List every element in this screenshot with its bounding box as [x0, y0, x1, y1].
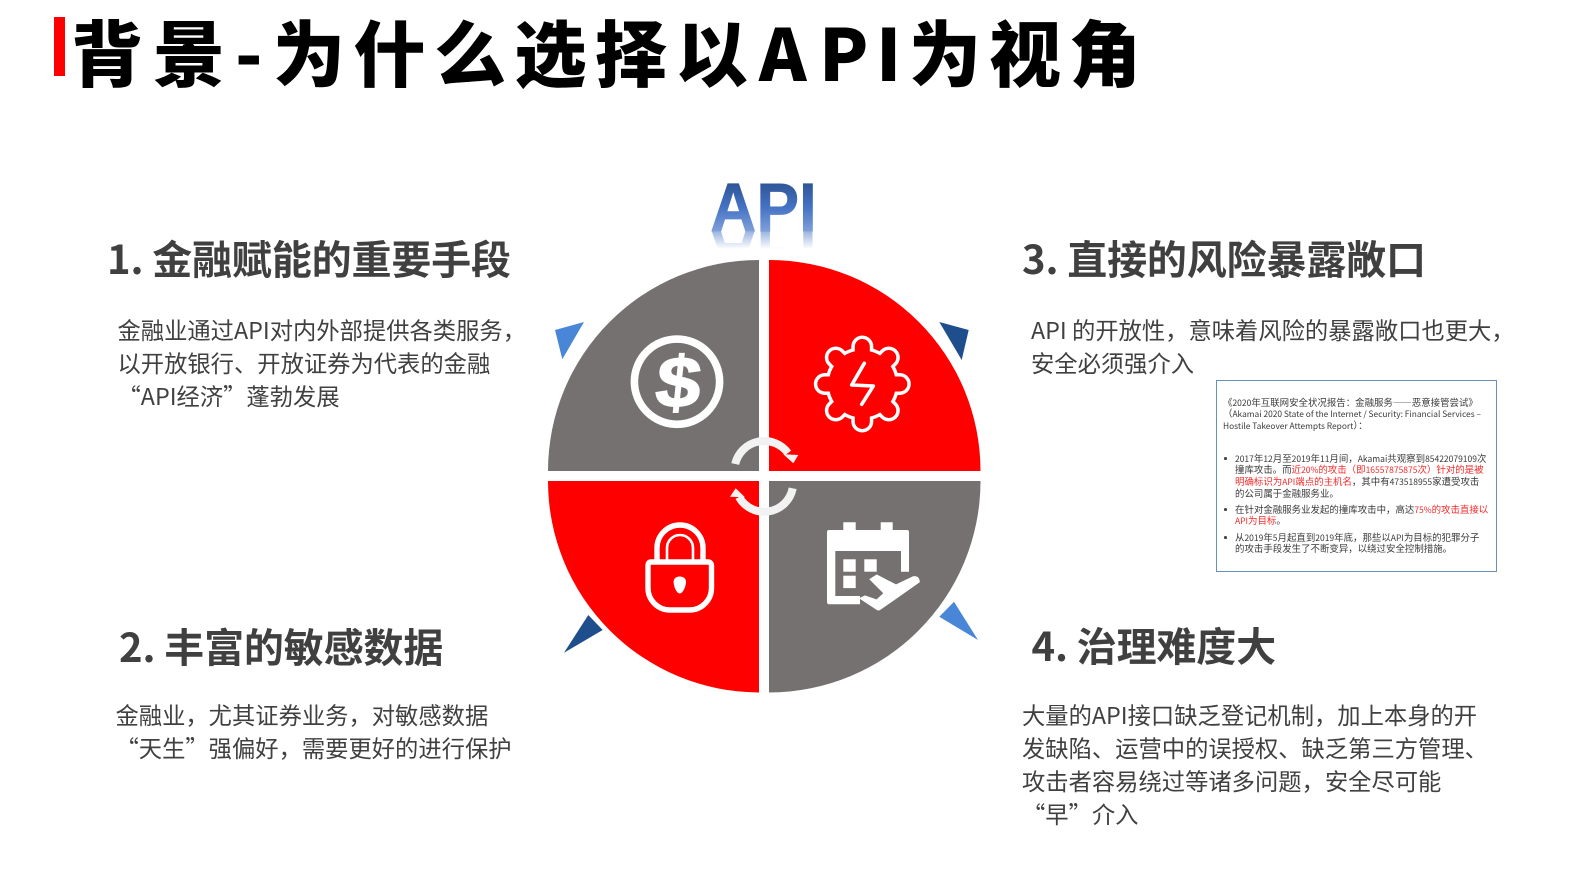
title: -: [235, 0, 271, 102]
title: A: [759, 0, 815, 102]
icon: dollar coin: $: [652, 343, 705, 423]
title: 为视角: [909, 0, 1149, 102]
body text 3: API 的开放性，意味着风险的暴露敞口也更大，: [1031, 312, 1515, 346]
report bullet 1: 明确标识为API端点的主机名，其中有473518955家遭受攻击: [1235, 474, 1479, 488]
title: I: [876, 0, 909, 102]
icon: gear with lightning bolt: [825, 346, 900, 422]
body text 2: 金融业，尤其证券业务，对敏感数据: [116, 696, 488, 730]
title: [71, 0, 1149, 102]
icon: padlock: [648, 525, 712, 610]
report bullet 2: API为目标。: [1235, 513, 1286, 527]
quadrant: bottom-left red: [548, 481, 759, 692]
body text 1: [118, 312, 526, 412]
pointer: bottom-right: [939, 602, 978, 640]
panel: 4 governance difficulty: [1022, 614, 1488, 830]
quadrant: top-right red: [769, 260, 980, 471]
API label with reflection: API: [710, 170, 817, 247]
quadrant: bottom-right grey: [769, 481, 980, 692]
report heading: 《2020年互联网安全状况报告：金融服务——恶意接管尝试》: [1223, 394, 1478, 408]
heading 4: 4. 治理难度大: [1032, 614, 1276, 672]
body text 4: “早”介入: [1022, 796, 1138, 830]
title: 背景: [71, 0, 235, 102]
central diagram: [548, 170, 980, 692]
title accent bar: [54, 17, 65, 76]
panel: 3 risk exposure: [1022, 228, 1515, 379]
body text 2: [116, 696, 512, 764]
arrow: cycle top: [735, 441, 798, 464]
report bullet 3: 从2019年5月起直到2019年底，那些以API为目标的犯罪分子: [1235, 530, 1479, 544]
API label with reflection: API: [710, 215, 817, 292]
heading 1: 1. 金融赋能的重要手段: [107, 228, 511, 286]
body text 4: 攻击者容易绕过等诸多问题，安全尽可能: [1022, 763, 1441, 797]
body text 4: [1022, 697, 1488, 830]
body text 1: 金融业通过API对内外部提供各类服务，: [118, 312, 526, 346]
report bullet 3: [1224, 530, 1479, 555]
panel: 2 sensitive data: [116, 616, 512, 764]
body text 1: 以开放银行、开放证券为代表的金融: [118, 345, 490, 379]
report bullet 2: 在针对金融服务业发起的撞库攻击中，高达75%的攻击直接以: [1235, 502, 1488, 516]
body text 4: 大量的API接口缺乏登记机制，加上本身的开: [1022, 697, 1477, 731]
icon: dollar coin: [634, 339, 720, 424]
heading 2: 2. 丰富的敏感数据: [119, 616, 443, 674]
body text 4: 发缺陷、运营中的误授权、缺乏第三方管理、: [1022, 730, 1488, 764]
report bullet 1: 2017年12月至2019年11月间，Akamai共观察到85422079109次: [1235, 450, 1486, 464]
arrow: cycle bottom: [730, 488, 793, 512]
title: P: [819, 0, 876, 102]
icon: calendar with plane: [827, 522, 919, 610]
report heading: （Akamai 2020 State of the Internet / Security: Financial Services –: [1223, 406, 1481, 420]
body text 3: 安全必须强介入: [1031, 345, 1194, 379]
quadrant: top-left grey: [548, 260, 759, 471]
report heading: [1223, 394, 1481, 432]
pointer: bottom-left: [564, 615, 603, 653]
report bullet 2: [1224, 502, 1488, 527]
report heading: Hostile Takeover Attempts Report）：: [1223, 418, 1368, 432]
body text 1: “API经济”蓬勃发展: [118, 378, 340, 412]
report bullet 1: [1224, 450, 1486, 500]
pointer: top-right: [939, 322, 969, 360]
report bullet 3: 的攻击手段发生了不断变异，以绕过安全控制措施。: [1235, 541, 1452, 555]
body text 2: “天生”强偏好，需要更好的进行保护: [116, 730, 512, 764]
report excerpt box: [1216, 380, 1497, 572]
report bullet 1: 的公司属于金融服务业。: [1235, 486, 1339, 500]
report bullet 1: 撞库攻击。而近20%的攻击（即16557875875次）针对的是被: [1235, 462, 1484, 476]
pointer: top-left: [555, 322, 584, 359]
title: 为什么选择以: [273, 0, 756, 102]
panel: 1 financial empowerment: [107, 228, 526, 412]
heading 3: 3. 直接的风险暴露敞口: [1022, 228, 1426, 286]
body text 3: [1031, 312, 1515, 379]
